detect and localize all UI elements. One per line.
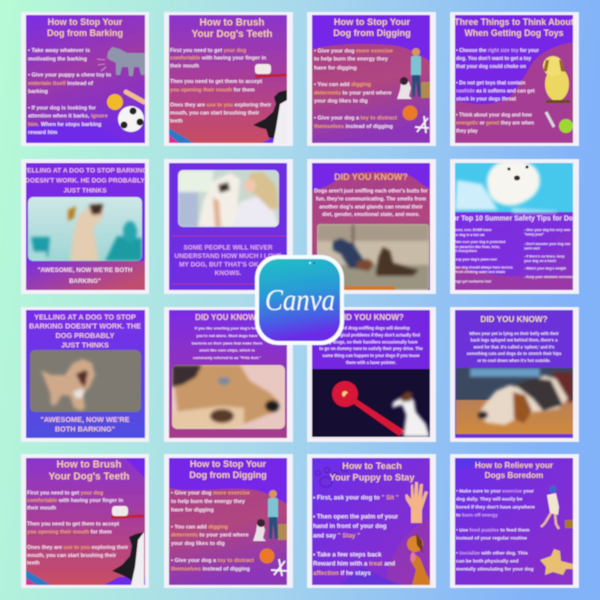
heading: JUST THINKS — [63, 187, 107, 194]
icon: basketball — [402, 106, 418, 120]
icon: black and white dog — [253, 90, 287, 143]
caption: BOTH BARKING" — [55, 424, 115, 433]
tips, right column: - Don't assume your dog can — [524, 242, 570, 246]
body text: have for digging — [314, 65, 357, 71]
body text: you opening their mouth for them — [170, 87, 255, 93]
fact text: If you like smelling your dog's feet, — [195, 326, 259, 331]
body text — [28, 48, 112, 136]
body text: affection if he stays — [313, 570, 371, 577]
panel: did you know, frito feet — [164, 307, 293, 442]
heading: BARKING DOESN'T WORK. THE — [29, 322, 141, 331]
tips, right column: - Keep your windows screened — [524, 275, 574, 279]
body text: mouth, you can start brushing their — [27, 553, 116, 559]
Canva app icon: Canva — [265, 282, 335, 317]
panel: how to relieve boredom — [450, 454, 579, 588]
icon: tennis ball — [559, 119, 573, 133]
title: How to Teach — [342, 461, 402, 471]
fact text: or to cool down when it's hot outside. — [477, 358, 551, 363]
panel: did you know, sniffing dogs — [307, 159, 436, 294]
tips, right column: "kiddy pool" — [524, 232, 545, 236]
caption: "AWESOME, NOW WE'RE BOTH — [38, 267, 133, 274]
fact text: you're not alone. Most dogs have — [196, 333, 259, 338]
heading: DOESN'T WORK. HE DOG PROBABLY — [25, 177, 145, 184]
fact text: fun, they're communicating. The smells from — [316, 197, 426, 203]
body text: hand in front of your dog — [313, 523, 387, 530]
body text: Then you need to get them to accept — [170, 79, 262, 85]
body text: • Give your dog a toy to distract — [171, 558, 254, 564]
heading: DID YOU KNOW? — [195, 313, 261, 322]
icon: toothbrush — [111, 506, 144, 519]
icon: person and dog — [397, 48, 431, 99]
panel: how to brush teeth, repeat: Your Dog's Teeth — [49, 472, 129, 482]
caption: BARKING" — [69, 278, 101, 285]
panel: three things about dog toys — [450, 12, 579, 146]
body text — [313, 495, 399, 577]
body text: stuck in your dogs throat — [456, 96, 516, 102]
body text: • You can add digging — [171, 524, 228, 530]
icon: yellow cartoon dog — [543, 56, 570, 103]
photo: two dogs in field — [317, 224, 429, 290]
body text: • Choose the right size toy for your — [456, 48, 539, 54]
tips, left column: to fresh drinking water and shade — [451, 270, 505, 274]
body text: • Give your puppy a chew toy to — [28, 73, 112, 79]
icon: grey toy — [546, 112, 554, 127]
panel: how to brush teeth: Your Dog's Teeth — [192, 29, 272, 40]
body text: have for digging — [171, 507, 214, 513]
heading: YELLING AT A DOG TO STOP BARKING — [23, 167, 147, 174]
tips, right column: swim well — [524, 246, 540, 250]
panel: how to brush teeth, repeat — [21, 454, 149, 588]
body text: to help burn the energy they — [171, 499, 246, 505]
photo: woman kissing white dog — [178, 170, 279, 227]
icon: toothbrush — [255, 64, 287, 78]
title: How to Brush — [200, 18, 264, 28]
message text: UNDERSTAND HOW MUCH I LOVE — [174, 253, 282, 260]
message text: KNOWS. — [215, 270, 242, 277]
body text: can be both physically and — [456, 559, 519, 565]
body text: and say " Stay " — [313, 532, 360, 539]
heading: DID YOU KNOW? — [334, 172, 408, 182]
body text: • Take away whatever is — [28, 48, 90, 54]
body text: reward him — [28, 130, 57, 136]
panel: yelling at a dog, puppy photo — [21, 307, 149, 442]
body text: energetic or genet they are when — [456, 121, 534, 127]
icon: cartoon brown dog — [407, 533, 430, 585]
tips, left column: • Keep your dog's paws cool — [451, 258, 497, 262]
panel: how to stop digging: Dog from Digging — [333, 28, 411, 38]
body text: First you need to get your dog — [170, 48, 246, 54]
fact text: Dogs aren't just sniffing each other's butts for — [314, 189, 428, 195]
icon: crossed bones — [415, 116, 429, 133]
body text — [27, 490, 128, 567]
panel: how to stop digging, repeat — [164, 454, 293, 588]
icon: bone — [126, 92, 144, 102]
body text: Ones they are use to you exploring their — [170, 103, 271, 109]
icon: person and dog — [253, 490, 287, 541]
body text: comfortable with having your finger in — [27, 498, 123, 504]
message text: SOME PEOPLE WILL NEVER — [183, 245, 273, 252]
icon: black and white dog — [112, 532, 144, 585]
fact text: Trained drug-sniffing dogs will develop — [332, 326, 410, 330]
body text: barking — [28, 89, 48, 95]
tips, right column — [524, 228, 574, 279]
photo: beagle on wood floor — [456, 368, 573, 434]
icon: basketball — [260, 548, 274, 564]
body text: First you need to get your dog — [27, 490, 103, 496]
photo: barking dog, teal room — [28, 197, 142, 261]
icon: leaping golden dog — [540, 549, 573, 575]
fact text: to go on dummy runs to satisfy their prey drive. The — [319, 346, 423, 351]
photo: yawning puppy — [30, 350, 141, 412]
caption — [40, 415, 130, 433]
panel: some people will never understand — [164, 159, 293, 294]
body text: your dog likes to dig — [171, 541, 225, 547]
fact text: diet, gender, emotional state, and more. — [322, 212, 420, 218]
body text — [456, 488, 535, 572]
body text: their mouth — [170, 64, 199, 70]
heading — [29, 312, 141, 349]
icon: soccer ball — [118, 106, 144, 132]
icon: crossed bones — [271, 559, 287, 576]
title: How to Brush — [56, 460, 122, 470]
icon: open hand — [405, 482, 428, 523]
fact text: them with a laser pointer. — [346, 360, 396, 365]
fact text: bacteria on their paws that make them — [192, 340, 263, 345]
panel: how to stop barking: Dog from Barking — [47, 28, 123, 38]
heading — [23, 167, 147, 194]
body text: • Think about your dog and how — [456, 112, 532, 118]
body text: • Do not get toys that contain — [456, 80, 525, 86]
body text: deterrents to your yard where — [314, 90, 392, 96]
body text: themselves instead of digging — [171, 566, 250, 572]
fact text — [319, 326, 423, 365]
message text: MY DOG, BUT THAT'S OK, GOD — [179, 261, 277, 268]
panel: yelling at a dog, teal photo — [21, 159, 149, 294]
heading: DOG PROBABLY — [56, 331, 115, 340]
panel: how to brush teeth — [164, 12, 293, 146]
body text: that your dog could choke on — [456, 64, 526, 70]
caption: "AWESOME, NOW WE'RE — [40, 415, 130, 424]
body text: attention when it barks, ignore — [28, 114, 108, 120]
fact text: same thing can happen to your dogs if you tease — [322, 353, 420, 358]
tips, left column: your dog in a hot car — [451, 233, 485, 237]
body text: • Give your dog more exercise — [314, 48, 393, 54]
fact text: something cats and dogs do to stretch their hips — [467, 351, 562, 356]
title: Three Things to Think About — [454, 17, 574, 27]
fact text — [467, 331, 562, 363]
body text: Then you need to get them to accept — [27, 521, 119, 527]
photo: white dog swimming — [455, 160, 573, 213]
tips, right column: - Watch your dog's weight — [524, 266, 567, 270]
panel: three things about dog toys: When Getting Dog Toys — [464, 28, 564, 38]
tips, left column — [451, 228, 513, 284]
heading: JUST THINKS — [61, 340, 109, 349]
panel: did you know, splooting beagle — [450, 307, 579, 442]
fact text — [192, 326, 263, 360]
body text: • If your dog is looking for — [28, 105, 97, 111]
body text: • You can add digging — [314, 82, 371, 88]
body text: their mouth — [27, 506, 56, 512]
heading: DID YOU KNOW? — [480, 315, 548, 324]
heading: DID YOU KNOW? — [338, 313, 404, 322]
body text: • Take a few steps back — [313, 551, 382, 558]
panel: summer safety tips — [447, 159, 581, 294]
title: How to Relieve your — [475, 461, 554, 470]
fact text: commonly referred to as "Frito feet." — [193, 355, 261, 360]
body text: bored if they don't have anywhere — [456, 504, 535, 510]
body text: • Socialize with other dog. This — [456, 551, 528, 557]
body text: • Then open the palm of your — [313, 514, 399, 521]
body text: • Give your dog more exercise — [171, 491, 250, 497]
icon: running person — [541, 486, 573, 529]
panel: how to stop digging, repeat: Dog from Digging — [189, 470, 267, 480]
tips, left column: • Make sure your dog is protected — [451, 240, 505, 244]
body text — [456, 48, 539, 135]
fact text: any drugs, so their handlers occasionally have — [324, 340, 418, 344]
body text: rawhide as it softens and can get — [456, 88, 535, 94]
paw print pattern — [316, 464, 349, 487]
body text: your dog likes to dig — [314, 99, 368, 105]
panel: how to stop barking — [21, 12, 149, 146]
body text: Ones they are use to you exploring their — [27, 545, 128, 551]
body text: him. When he stops barking — [28, 122, 101, 128]
fact text: psychological problems if they don't actually find — [322, 332, 421, 338]
body text: comfortable with having your finger in — [170, 56, 266, 62]
panel: how to relieve boredom: Dogs Boredom — [485, 471, 543, 480]
body text: • Give your dog a toy to distract — [314, 116, 397, 122]
tips, left column: from parasites like fleas, ticks, — [451, 245, 500, 249]
body text: teeth — [170, 118, 183, 124]
body text — [314, 48, 397, 130]
fact text: another dog's anal glands can reveal their — [319, 205, 423, 211]
body text: instead of your regular routine — [456, 535, 527, 541]
title: How to Stop Your — [48, 17, 123, 27]
photo: dog and red laser — [312, 369, 430, 437]
tips, right column: your dog on a leash — [524, 259, 556, 263]
body text: they play — [456, 129, 478, 135]
caption — [38, 267, 133, 285]
photo: dog close-up with paw — [172, 365, 285, 429]
body text: to help burn the energy they — [314, 57, 389, 63]
message text — [174, 245, 282, 277]
fact text: smell like corn chips, which is — [199, 348, 255, 353]
body text — [170, 48, 271, 124]
body text: motivating the barking — [28, 56, 87, 62]
panel: did you know, laser pointer — [307, 307, 436, 442]
tips, left column: • Dogs get sunburns too! — [451, 280, 491, 284]
icon: grey bulldog — [97, 47, 145, 76]
fact text: back legs splayed out behind them, there's a — [471, 338, 558, 342]
body text: teeth — [27, 561, 40, 567]
fact text — [314, 189, 428, 218]
tips, right column: - If there's no fence, keep — [524, 254, 565, 258]
panel: how to teach puppy to stay: Your Puppy to Stay — [329, 472, 415, 482]
body text — [171, 491, 254, 572]
body text: mouth, you can start brushing their — [170, 111, 259, 117]
fact text: When your pet is lying on their belly with their — [469, 331, 559, 336]
tips, right column: - Give your dog his very own — [524, 228, 570, 232]
body text: • Make sure to your exercise your — [456, 488, 534, 494]
Canva app icon — [255, 255, 344, 345]
icon: gold ball — [107, 94, 123, 110]
body text: mentally stimulating for your dog — [456, 566, 533, 572]
body text: themselves instead of digging — [314, 124, 393, 130]
fact text: word for that. It's called a 'sploot,' and it's — [472, 344, 555, 350]
heading: Our Top 10 Summer Safety Tips for Dogs — [447, 215, 581, 222]
body text: • First, ask your dog to " Sit " — [313, 495, 399, 502]
title: How to Stop Your — [334, 17, 411, 27]
title: How to Stop Your — [190, 459, 267, 469]
heading: YELLING AT A DOG TO STOP — [34, 312, 136, 321]
body text: Reward him with a treat and — [313, 561, 395, 568]
body text: you opening their mouth for them — [27, 529, 112, 535]
tips, left column: • Never, ever, EVER leave — [451, 228, 492, 232]
body text: dog daily. They will easily be — [456, 496, 523, 502]
body text: entertain itself instead of — [28, 81, 93, 87]
body text: to burn off energy — [456, 512, 498, 518]
body text: deterrents to your yard where — [171, 533, 249, 539]
body text: • Use food puzzles to feed them — [456, 528, 530, 534]
panel: how to stop digging — [307, 12, 436, 146]
tips, left column: and mosquitoes — [451, 249, 477, 253]
body text: dog. You don't want to get a toy — [456, 56, 531, 62]
panel: how to teach puppy to stay — [307, 454, 436, 588]
tips, left column: • Your dog should always have access — [451, 266, 513, 270]
